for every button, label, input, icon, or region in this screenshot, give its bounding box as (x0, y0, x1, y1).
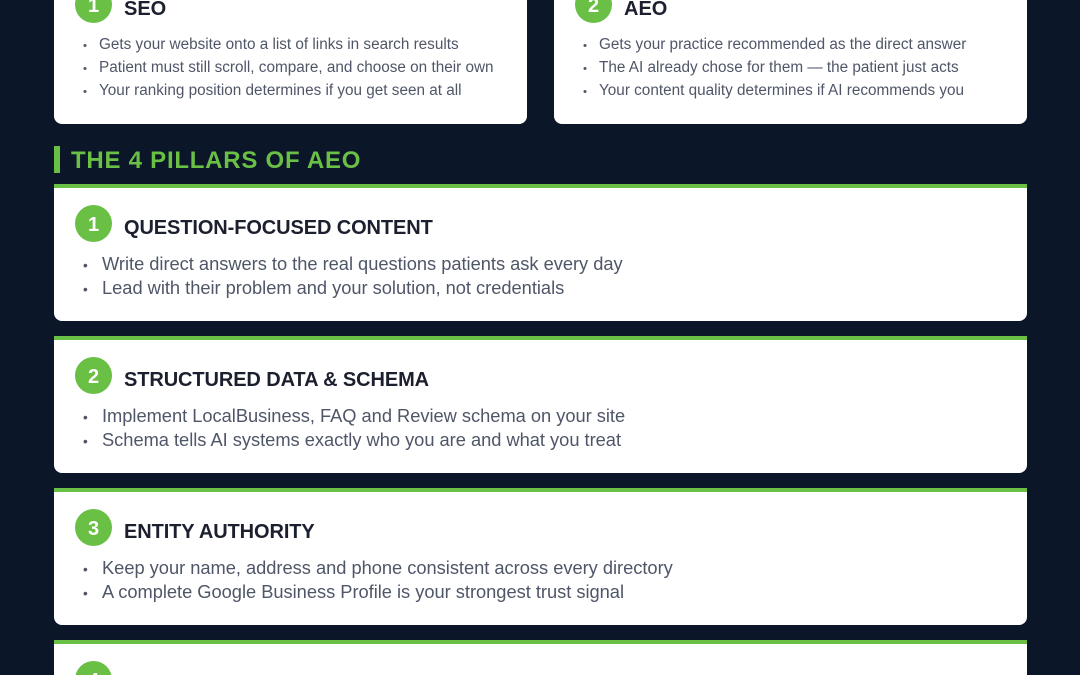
bullets: AEO (584, 36, 966, 99)
bullets: Implement LocalBusiness, FAQ and Review schema on your site (102, 405, 625, 426)
bullets (84, 557, 673, 602)
bullets: SEO: Your ranking position determines if you get seen at all (99, 82, 462, 99)
card: AEO (554, 0, 1027, 124)
icon: number 1: 1 (88, 214, 99, 236)
bullets: AEO: The AI already chose for them — the patient just acts (599, 59, 959, 76)
icon: number 2 (575, 0, 612, 23)
bullets: SEO: Patient must still scroll, compare, and choose on their own (99, 59, 494, 76)
panel: pillar 3 (54, 488, 1027, 625)
bullets: SEO (84, 36, 494, 99)
heading: ENTITY AUTHORITY (124, 521, 315, 543)
icon: number 4 (75, 661, 112, 675)
icon: number 1 (75, 0, 112, 23)
icon: number 3: 3 (88, 518, 99, 540)
bullets: A complete Google Business Profile is your strongest trust signal (102, 580, 624, 602)
bullets: Lead with their problem and your solution, not credentials (102, 276, 564, 298)
bullets: Keep your name, address and phone consistent across every directory (102, 557, 673, 578)
icon: number 3 (75, 509, 112, 546)
heading: STRUCTURED DATA & SCHEMA (124, 369, 429, 391)
bullets (84, 405, 625, 450)
icon: number 1 (75, 205, 112, 242)
bullets: AEO: Gets your practice recommended as the direct answer (599, 36, 966, 53)
panel: pillar 1 (54, 184, 1027, 321)
bullets: SEO: Gets your website onto a list of links in search results (99, 36, 459, 53)
icon: number 2: 2 (88, 366, 99, 388)
panel: pillar 2 (54, 336, 1027, 473)
bullets: AEO: Your content quality determines if AI recommends you (599, 82, 964, 99)
bullets (84, 253, 623, 298)
heading: QUESTION-FOCUSED CONTENT (124, 217, 433, 239)
section heading: THE 4 PILLARS OF AEO (71, 147, 361, 174)
icon: number 2 (75, 357, 112, 394)
card: SEO (54, 0, 527, 124)
panel: pillar 4 (54, 640, 1027, 675)
bullets: Schema tells AI systems exactly who you are and what you treat (102, 428, 621, 450)
bullets: Write direct answers to the real questions patients ask every day (102, 253, 623, 274)
